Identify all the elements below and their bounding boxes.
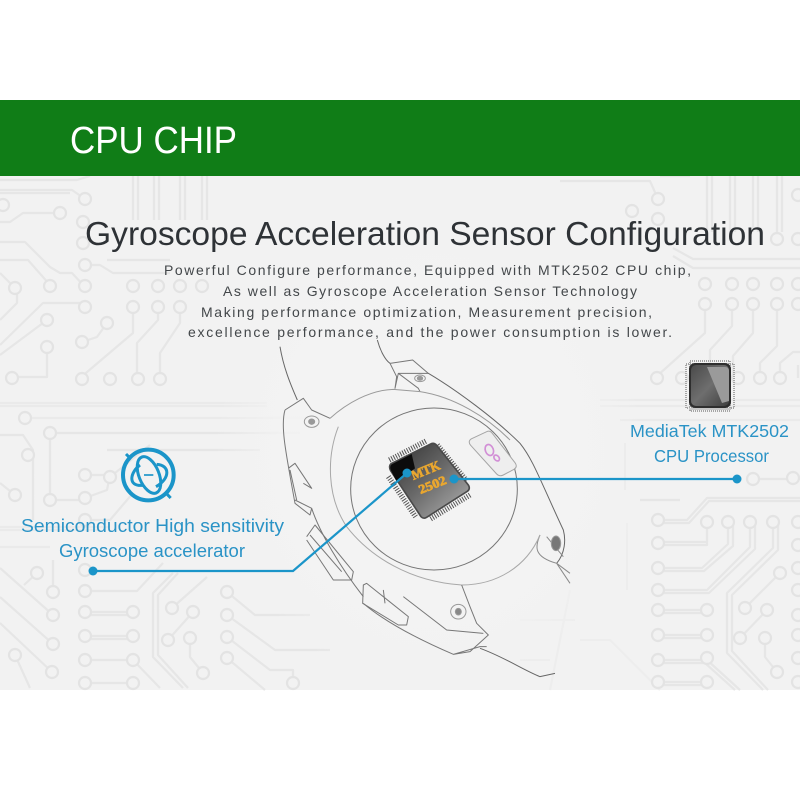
chip highlight [390,454,415,482]
description text block [164,262,691,340]
top lug [390,360,428,392]
description text block: As well as Gyroscope Acceleration Sensor Technology [223,283,637,299]
circuit panel background [0,176,800,690]
icon: processor [686,361,734,411]
case screws [304,375,561,619]
pad rings [79,193,91,205]
callout dots [88,468,742,576]
left callout text [21,515,285,561]
description text block: Making performance optimization, Measurement precision, [201,304,652,320]
sensor window [469,431,516,476]
description text block: Powerful Configure performance, Equipped with MTK2502 CPU chip, [164,262,691,278]
section heading: Gyroscope Acceleration Sensor Configuration [85,215,765,252]
top left traces [0,176,170,273]
callout connector lines [93,473,737,571]
chip text 2502: 2502 [417,473,448,497]
right lug [537,535,570,583]
middle left traces [0,433,300,520]
chip pins [388,441,470,519]
header title: CPU CHIP [70,120,237,162]
left lug and buttons [283,398,363,597]
case right edge [428,373,565,563]
inner back circle [351,408,517,570]
right callout text [630,421,789,466]
chip text MTK: MTK [409,457,443,483]
description text block: excellence performance, and the power consumption is lower. [188,324,672,340]
left callout text: Gyroscope accelerator [59,540,245,561]
chip body [390,443,469,518]
case upper arc [330,389,510,440]
right callout text: CPU Processor [654,446,769,466]
top right traces [560,176,690,199]
outer bezel ring [330,427,540,585]
centre fade [215,210,645,690]
right callout text: MediaTek MTK2502 [630,421,789,441]
watch straps [280,340,555,677]
processor chip with label [388,441,470,519]
sensor glyph [484,443,501,462]
left callout text: Semiconductor High sensitivity [21,515,285,536]
header band [0,100,800,176]
bottom right traces [658,498,800,690]
case lower edge [363,585,488,654]
icon: gyroscope [123,450,174,500]
bottom left traces [0,560,53,688]
watch sketch [280,340,570,677]
